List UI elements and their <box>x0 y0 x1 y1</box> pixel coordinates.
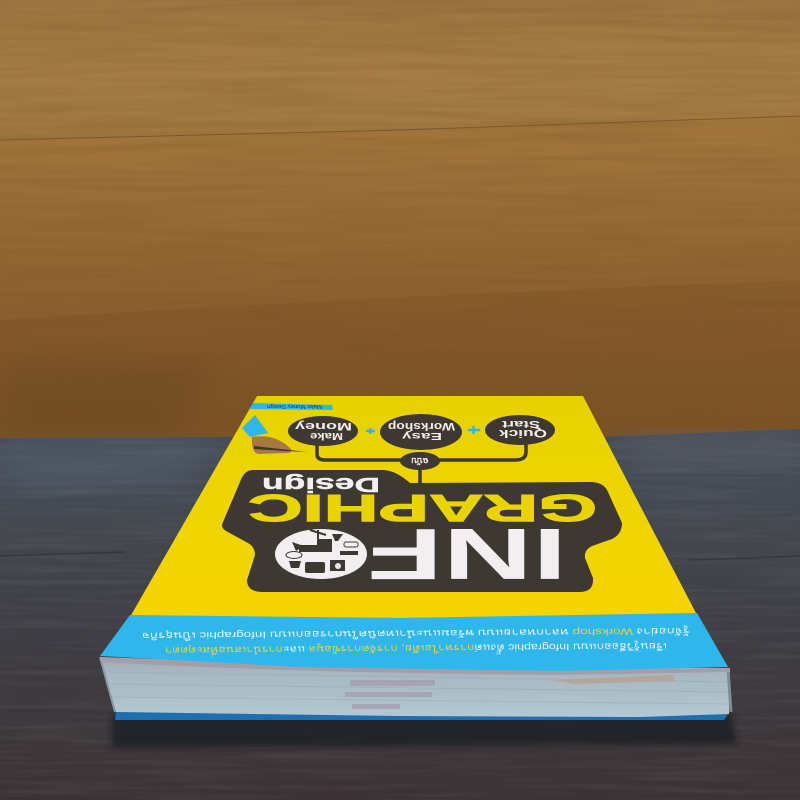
slate table surface <box>0 429 800 800</box>
title word INF: INF <box>367 514 567 595</box>
page block <box>100 657 731 717</box>
circle: Make Money: Make <box>309 430 343 441</box>
circle: Quick Start <box>485 415 555 445</box>
publisher strip: Make Money Design <box>267 403 322 409</box>
circle: Easy Workshop <box>380 414 462 450</box>
icon cluster circle <box>275 529 367 579</box>
title word GRAPHIC: GRAPHIC <box>248 486 597 528</box>
circle: Easy Workshop: Easy <box>402 430 442 442</box>
plus icon left <box>366 428 375 434</box>
blue bottom band <box>100 613 728 671</box>
blurb line one: รู้จักอย่าง Workshop หลากหลายแบบ พร้อมแนะนำเทคนิคในการออกแบบ Infographic เป็นธุรกิจ <box>142 625 690 643</box>
title word Design: Design <box>262 473 380 495</box>
circle: Quick Start: Start <box>501 418 540 429</box>
title panel <box>222 470 622 595</box>
connector lines <box>317 444 526 486</box>
circle: Make Money: Money <box>294 420 352 432</box>
circle: Easy Workshop: Workshop <box>388 420 455 432</box>
pencil hand icon <box>242 415 307 454</box>
circle: Make Money <box>288 416 358 446</box>
wood wall background <box>0 0 800 440</box>
blurb line two: เรียนรู้วิธีออกแบบ Infographic ตั้งแต่การหาไอเดีย, การจัดการข้อมูล และการนำเสนอที่สะดุดตา <box>165 640 667 657</box>
yellow cover <box>130 396 697 618</box>
back cover edge <box>115 711 728 720</box>
plus icon right <box>468 426 480 434</box>
circle: Quick Start: Quick <box>498 427 547 439</box>
book shadow on table <box>112 714 736 748</box>
publisher strip <box>250 403 333 410</box>
label circle: edition <box>400 452 440 470</box>
label circle: edition: ฉบับ <box>411 456 429 466</box>
book cover <box>100 396 728 671</box>
